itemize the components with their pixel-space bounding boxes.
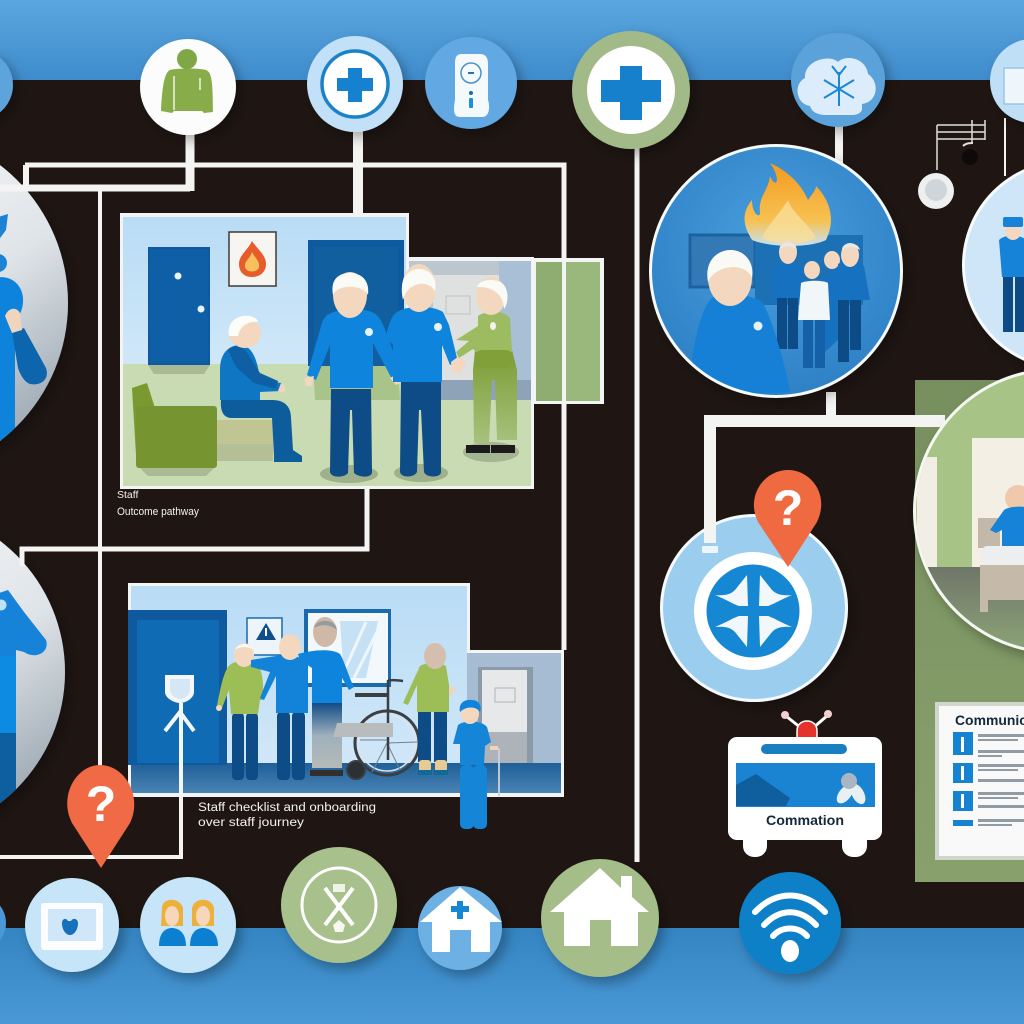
warning sign <box>247 618 282 655</box>
bottom icon: wifi <box>739 872 841 974</box>
top icon: left edge <box>0 50 13 120</box>
armchair <box>132 383 273 476</box>
notice board: communication sheet <box>937 704 1024 858</box>
connector lines <box>0 118 1005 862</box>
resident in green, right <box>403 643 457 775</box>
bottom icon: large house <box>541 859 659 977</box>
communication card with siren <box>728 710 882 857</box>
resident in green <box>456 277 519 462</box>
panel: fire emergency circle <box>649 144 903 398</box>
carer with walking stick <box>453 700 499 829</box>
caption: corridor scene: Staff checklist and onboarding <box>198 802 376 814</box>
resident in green, left <box>216 643 263 780</box>
bottom icon: tools badge <box>281 847 397 963</box>
door frame right <box>478 667 533 777</box>
top icon: green uniform <box>140 39 236 135</box>
bottom icon: house with cross <box>418 886 502 970</box>
caption: room scene <box>117 489 199 518</box>
bottom icon: left edge <box>0 895 6 951</box>
staff in blue, right <box>298 617 354 776</box>
caption: corridor scene <box>198 802 376 829</box>
staff in background, left <box>772 240 808 349</box>
caption: room scene: Outcome pathway <box>117 506 199 518</box>
caption: room scene: Staff <box>117 489 138 501</box>
wheelchair <box>333 680 419 779</box>
question pin, lower left <box>67 765 134 868</box>
staff in background, right <box>823 243 870 362</box>
question pin, lower left: ? <box>86 776 116 832</box>
icon: round speaker <box>918 173 954 209</box>
panel: olive side panel <box>915 380 1024 882</box>
door right <box>308 240 404 366</box>
bottom blue band <box>0 928 1024 1024</box>
standing staff member 1 <box>304 272 405 483</box>
panel: green striped wall tile <box>531 258 604 404</box>
sanitiser stem over frame <box>179 703 183 795</box>
seated resident <box>220 316 302 462</box>
staff in blue, middle <box>251 634 308 780</box>
standing staff member 2 <box>386 264 466 482</box>
door left <box>148 247 210 374</box>
question pin, alert circle: ? <box>773 480 803 536</box>
communication card with siren: Commation <box>766 812 844 828</box>
top blue band <box>0 0 1024 80</box>
panel: corridor scene <box>128 583 564 829</box>
door with sanitiser stand <box>128 610 227 765</box>
top icon: medical cross <box>307 36 403 132</box>
panel: alert circle with compass <box>660 514 848 702</box>
top icon: cloud with snowflake <box>791 33 885 127</box>
green cloth behind staff <box>313 366 400 400</box>
flame inner glow <box>762 200 816 244</box>
panel: left portrait circle bottom <box>0 540 65 804</box>
question pin, alert circle <box>754 470 821 567</box>
flames <box>744 163 831 246</box>
panel: bedroom circle <box>913 368 1024 657</box>
window <box>304 609 391 687</box>
connector end cap and tab on alert circle <box>702 515 718 553</box>
panel: care room scene <box>120 213 534 489</box>
top icon: sensor device <box>425 37 517 129</box>
bed and resident <box>978 485 1024 612</box>
top icon: right edge <box>990 39 1024 123</box>
panel: left portrait circle top <box>0 165 68 441</box>
icon: music staff <box>937 120 985 170</box>
bottom icon: tablet <box>25 878 119 972</box>
top icon: large medical cross <box>572 31 690 149</box>
foreground staff member <box>692 250 790 396</box>
bottom icon: two staff <box>140 877 236 973</box>
person in white <box>798 261 830 368</box>
panel: staff portrait circle right <box>962 160 1024 370</box>
compass star <box>715 575 792 647</box>
caption: corridor scene: over staff journey <box>198 817 304 829</box>
fire safety sign <box>229 232 276 286</box>
